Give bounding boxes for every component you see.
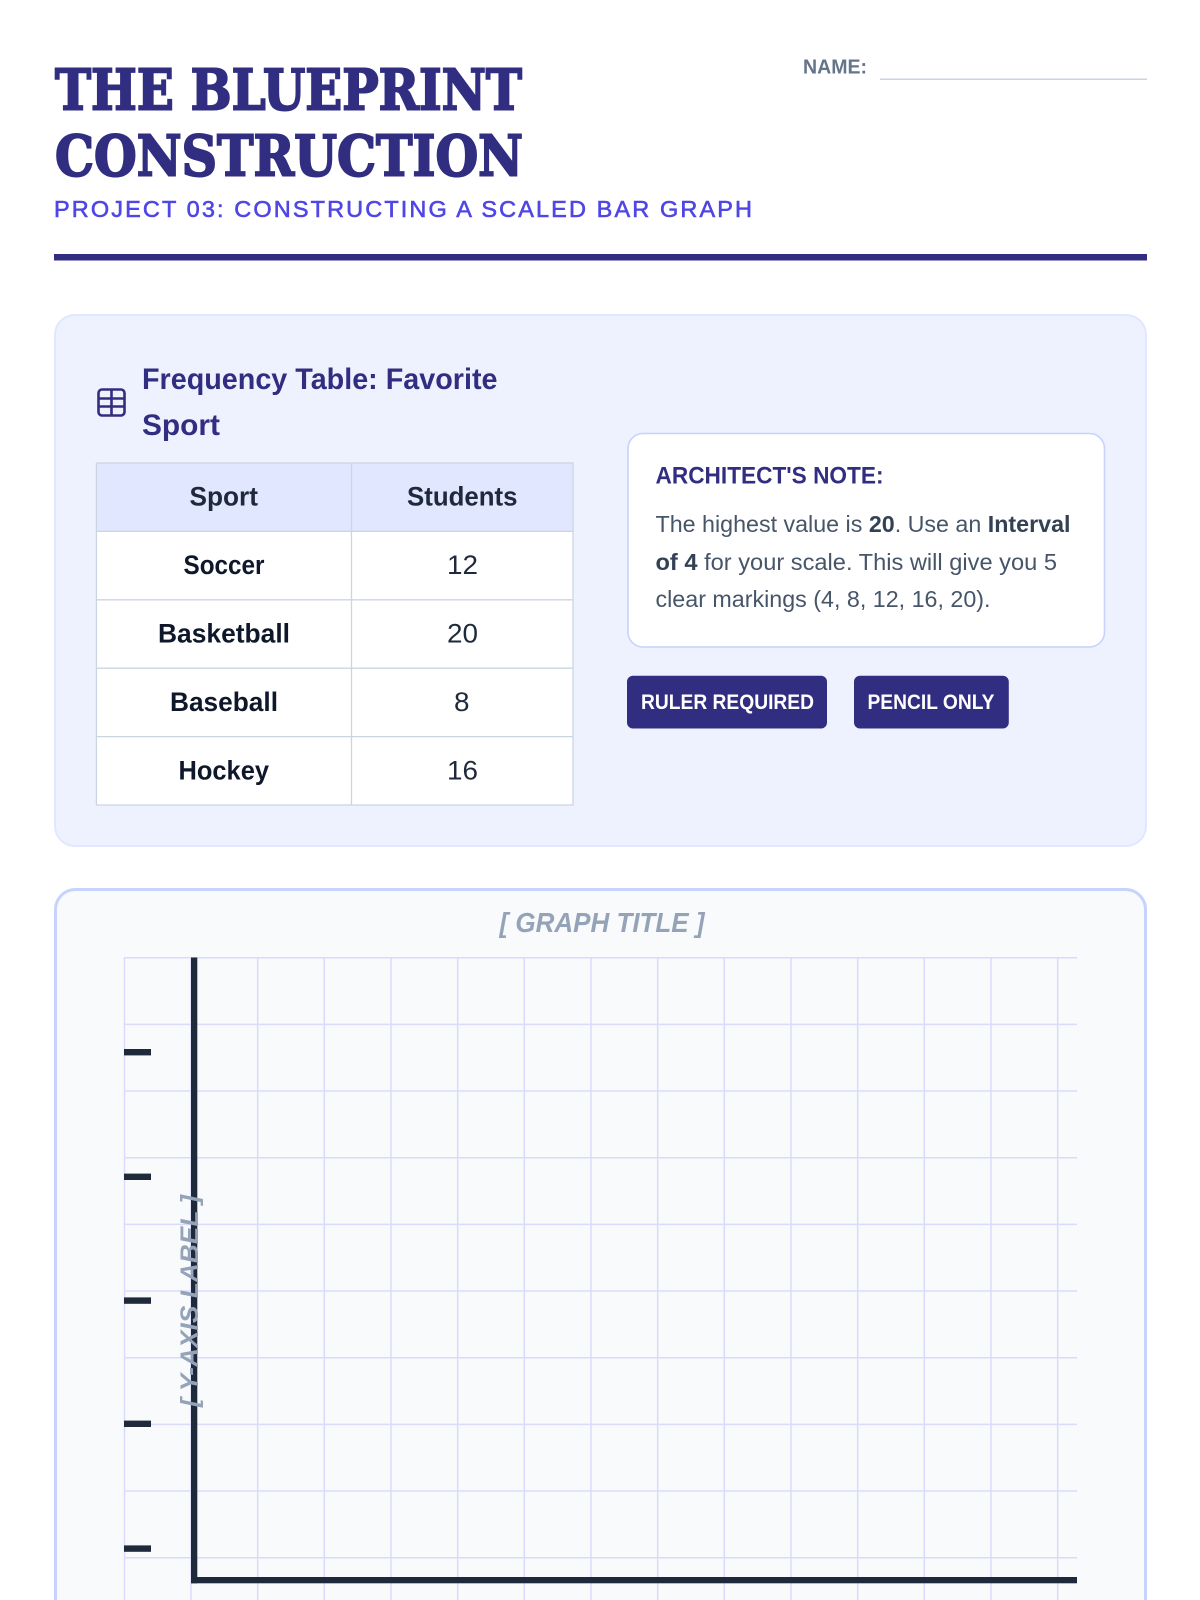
table header: Students: [407, 481, 518, 511]
badge: pencil only: [854, 676, 1009, 728]
name field: NAME:: [803, 56, 867, 78]
y-axis tick marks: [124, 1049, 151, 1552]
table rows: Baseball: [170, 687, 278, 717]
table rows: 8: [454, 687, 470, 717]
table rows: [158, 550, 478, 786]
axes: [191, 958, 1077, 1583]
table rows: Soccer: [184, 550, 264, 580]
callout: architect's note: The highest value is 20. Use an Interval: [656, 511, 1070, 537]
table rows: 16: [447, 756, 478, 786]
callout: architect's note: ARCHITECT'S NOTE:: [656, 462, 884, 490]
badge: ruler required: RULER REQUIRED: [641, 691, 814, 714]
callout: architect's note: of 4 for your scale. This will give you 5: [656, 549, 1057, 575]
title: [55, 58, 523, 190]
title: THE BLUEPRINT: [55, 58, 522, 124]
graph paper grid: [124, 958, 1077, 1600]
panel: graph: [56, 890, 1146, 1600]
title: CONSTRUCTION: [55, 124, 523, 190]
callout: architect's note: [628, 434, 1104, 647]
table rows: Hockey: [178, 756, 269, 786]
table header: [190, 481, 518, 511]
heading: frequency table: Sport: [142, 409, 220, 442]
badge: ruler required: [627, 676, 827, 728]
table rows: 20: [447, 618, 478, 648]
table rows: 12: [447, 550, 478, 580]
badge: pencil only: PENCIL ONLY: [868, 691, 994, 714]
heading: frequency table: Frequency Table: Favorite: [142, 363, 498, 396]
heading: frequency table: [142, 363, 498, 442]
frequency table: [96, 463, 573, 805]
panel: frequency table and note: [55, 315, 1146, 846]
table rows: Basketball: [158, 618, 290, 648]
callout: architect's note: clear markings (4, 8, 12, 16, 20).: [656, 586, 990, 612]
graph title placeholder: [ GRAPH TITLE ]: [499, 907, 706, 938]
header rule: [54, 254, 1147, 260]
subtitle: PROJECT 03: CONSTRUCTING A SCALED BAR GRAPH: [54, 196, 752, 222]
icon: table: [98, 390, 124, 416]
y-axis label placeholder: [ Y-AXIS LABEL ]: [176, 1193, 204, 1408]
table header: Sport: [190, 481, 258, 511]
